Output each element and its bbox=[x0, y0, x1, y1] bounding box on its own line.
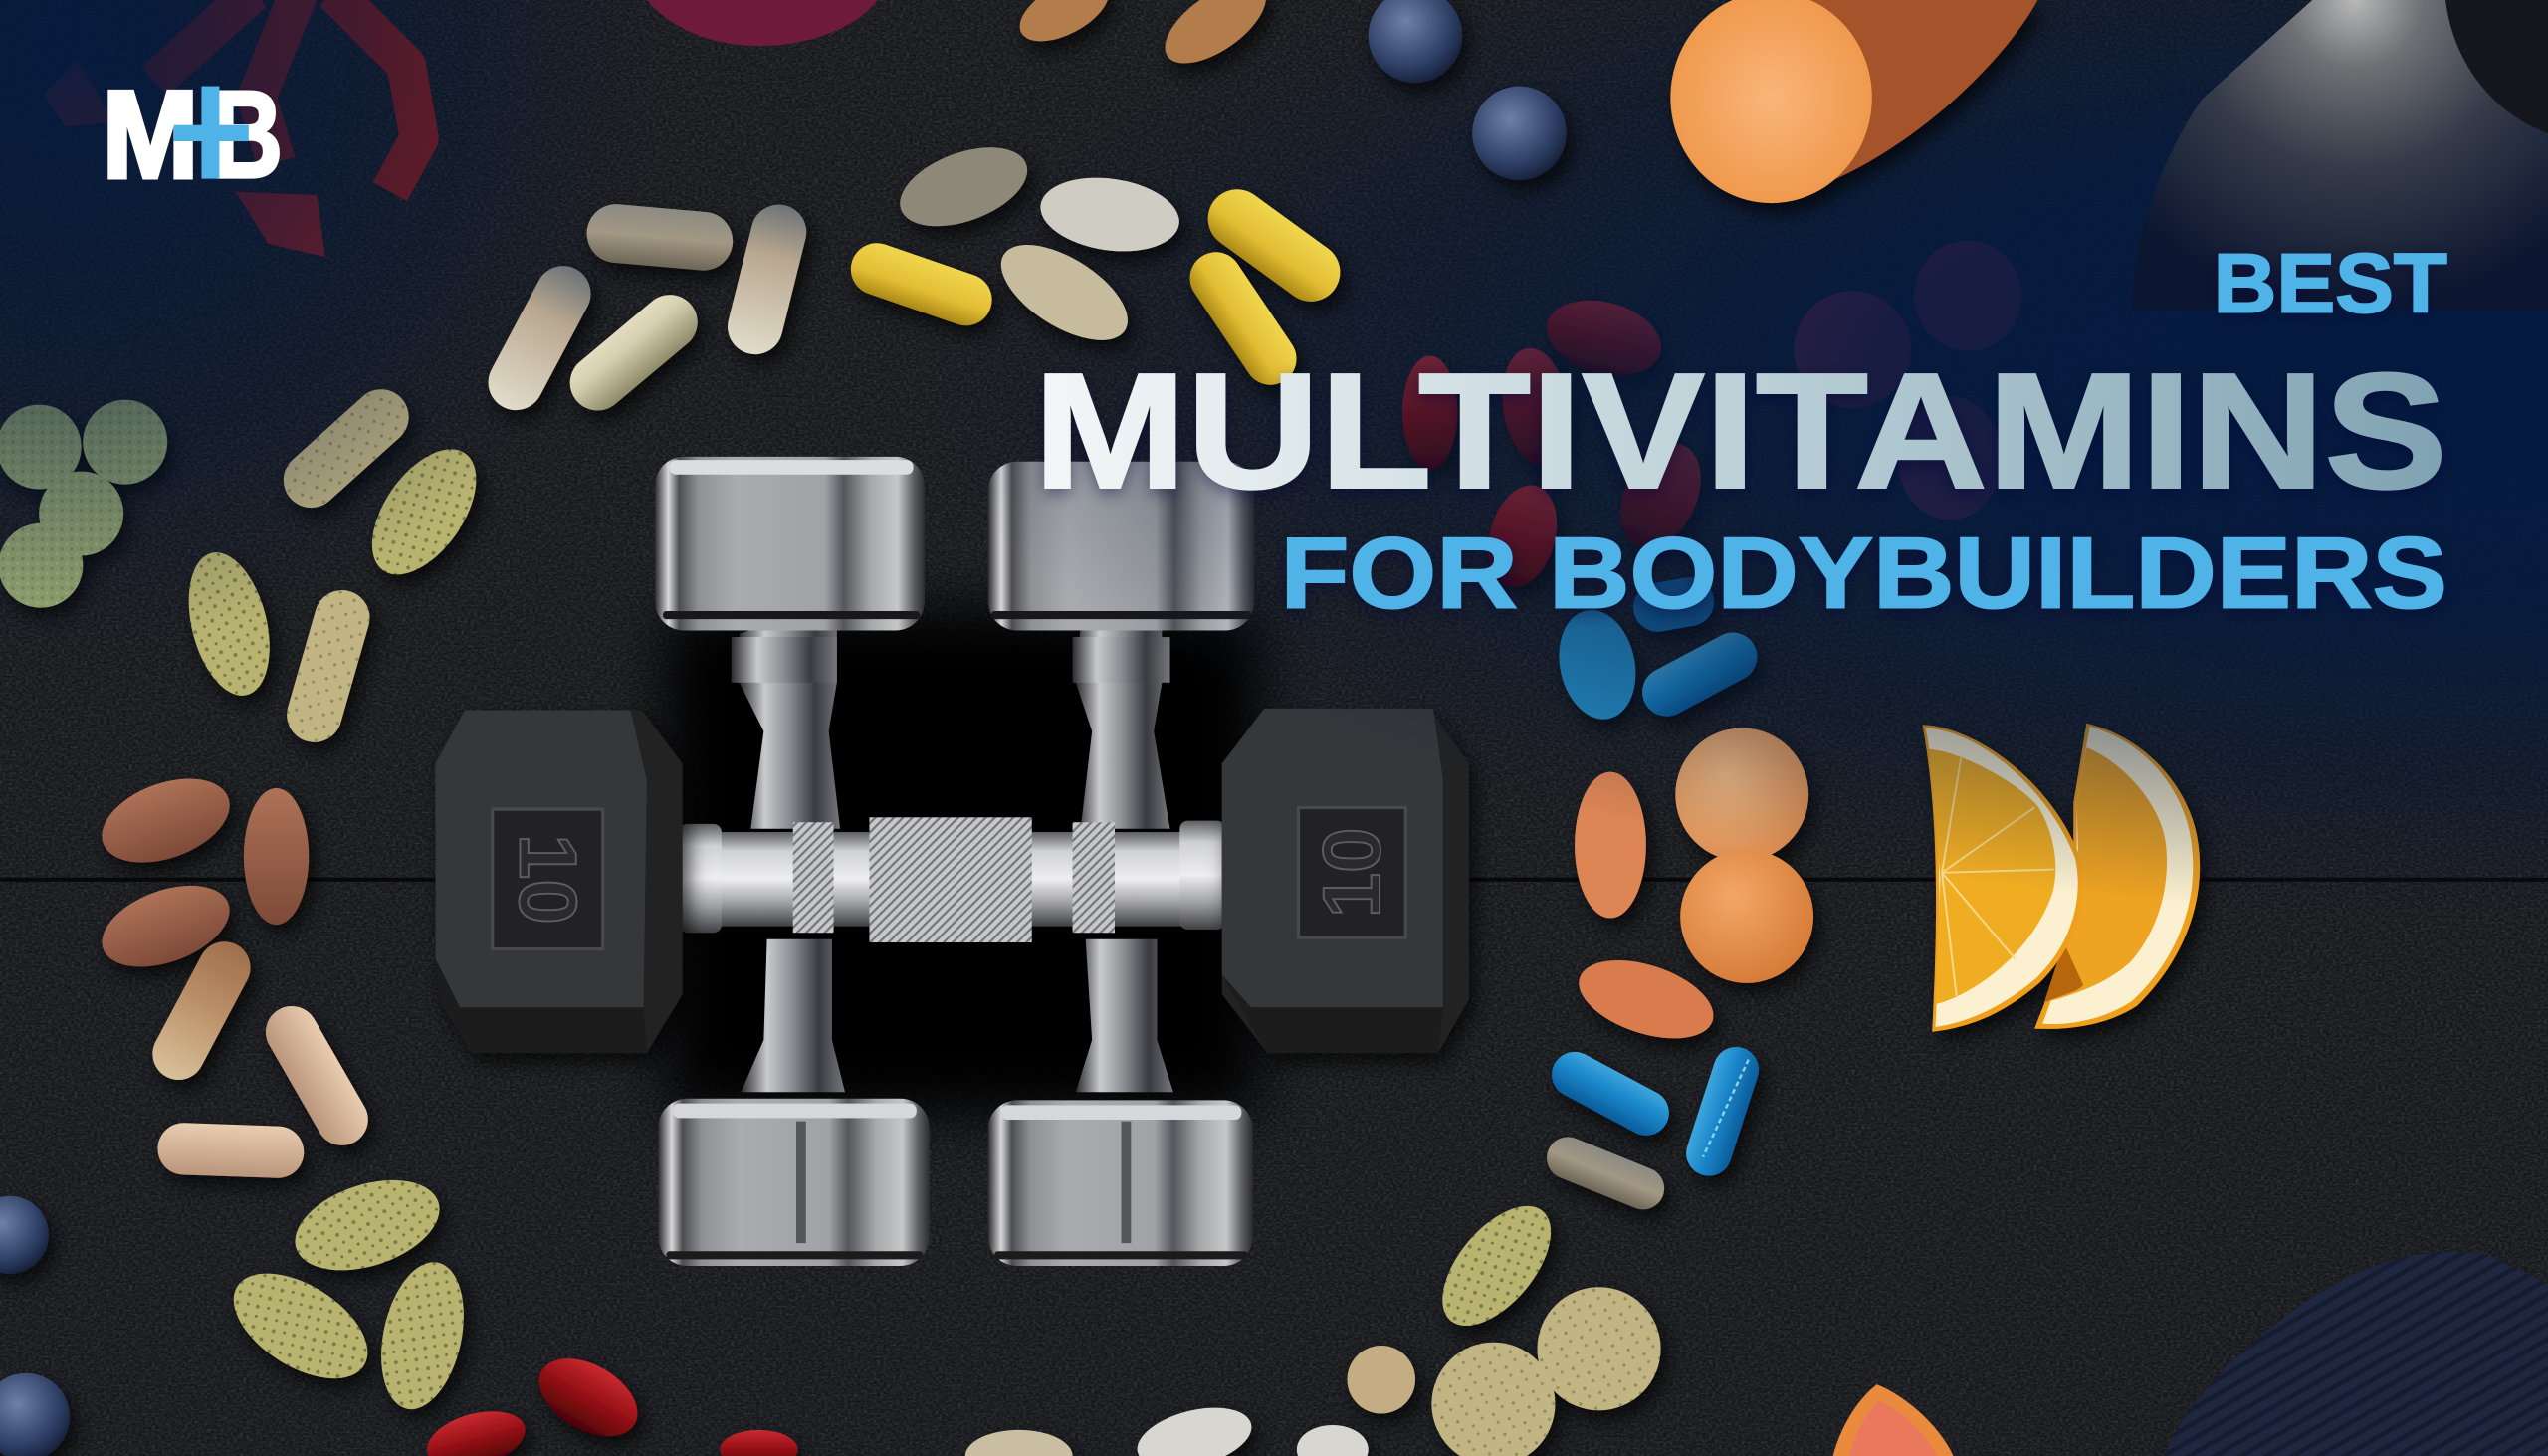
orange segment membranes bbox=[1942, 755, 2054, 996]
vertical dumbbell left bbox=[655, 457, 930, 1266]
rear orange slice bbox=[2034, 724, 2200, 1029]
softgels: bottom red bbox=[421, 1343, 798, 1456]
logo: M+B: B bbox=[211, 67, 283, 204]
logo plus sign bbox=[174, 87, 249, 179]
tablets: speckled bottom right cluster bbox=[1347, 1187, 1661, 1456]
tablets: speckled bottom left cluster bbox=[216, 1163, 476, 1417]
food: red pepper strips bbox=[44, 0, 419, 257]
title line: BEST: BEST bbox=[2214, 235, 2447, 330]
right hex head with 10 bbox=[1222, 709, 1469, 1053]
object: navy towel bbox=[2165, 1252, 2548, 1456]
food: orange slices bbox=[1922, 724, 2200, 1032]
tablets: bottom centre white and beige bbox=[965, 1397, 1369, 1456]
title bbox=[1033, 235, 2447, 630]
logo: M+B bbox=[103, 67, 283, 204]
softgels: red and blue near title bbox=[1402, 289, 1766, 727]
object: steel shaker bottle bbox=[2132, 0, 2548, 309]
weight label 10: 10 bbox=[503, 834, 593, 925]
object: crossed dumbbells bbox=[434, 457, 1469, 1266]
blueberries: left edge bbox=[0, 1196, 70, 1456]
tablets: green round tablets bbox=[0, 400, 167, 608]
food: almonds bbox=[1010, 0, 1279, 79]
food: blueberries top bbox=[1369, 0, 1567, 180]
tablets: brown and tan left cluster bbox=[91, 762, 377, 1179]
dumbbell shadow bbox=[666, 609, 1259, 1113]
logo: M+B: M bbox=[103, 67, 198, 204]
food: raspberries bbox=[1794, 241, 2021, 520]
front orange slice bbox=[1922, 725, 2083, 1032]
food: sweet potato bbox=[1670, 0, 2037, 203]
left hex head with 10 bbox=[434, 711, 683, 1053]
title line: MULTIVITAMINS: MULTIVITAMINS bbox=[1033, 339, 2447, 522]
title line: FOR BODYBUILDERS: FOR BODYBUILDERS bbox=[1281, 518, 2447, 630]
weight label 10: 10 bbox=[1307, 827, 1397, 918]
food: beet slice bbox=[647, 0, 878, 46]
capsules: top cluster bbox=[479, 132, 1352, 422]
capsules and tablets: green and tan left cluster bbox=[175, 378, 497, 748]
food: grapefruit wedge bbox=[1833, 1384, 1953, 1456]
vertical dumbbell right bbox=[988, 462, 1254, 1266]
tablets: orange and blue right cluster bbox=[1541, 728, 1813, 1216]
horizontal dumbbell handle bbox=[676, 817, 1228, 942]
